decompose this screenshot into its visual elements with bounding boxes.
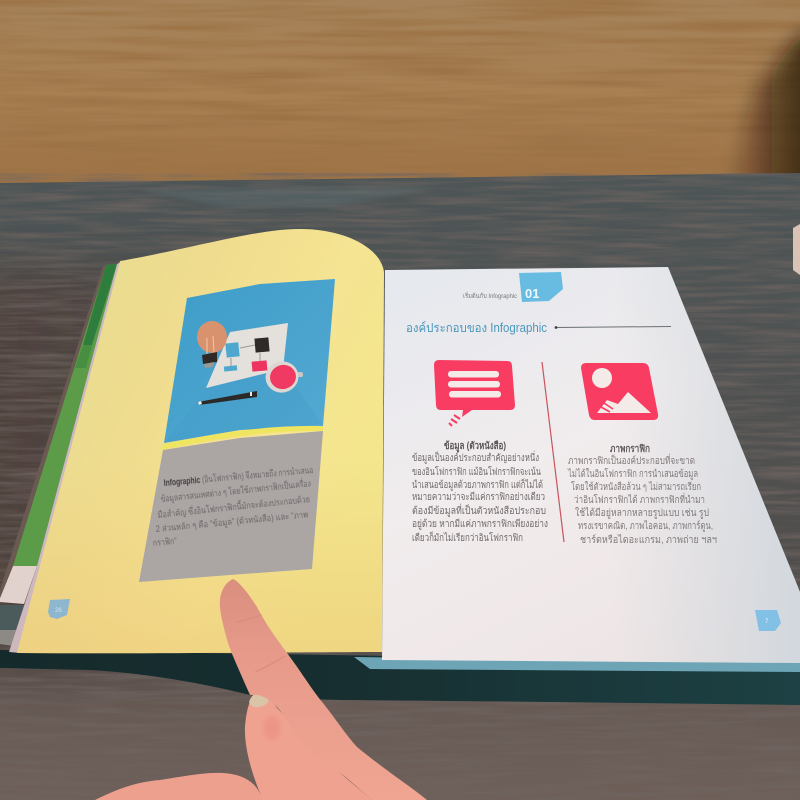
left yellow page: [17, 229, 384, 653]
paper with flow chart: [206, 323, 288, 388]
left page number tab: [48, 599, 70, 619]
blue illustration panel: [164, 279, 335, 443]
column: text data: เดียวก็มักไม่เรียกว่าอินโฟกราฟิก: [412, 530, 523, 544]
grey text box: ข้อมูลสารสนเทศต่าง ๆ โดยใช้ภาพกราฟิกเป็นเครื่อง: [160, 476, 311, 505]
yellow band under panel: [160, 426, 323, 450]
column: graphics: ภาพกราฟิก: [610, 443, 650, 455]
grey text box: กราฟิก”: [152, 536, 177, 548]
chapter tab 01: 01: [525, 286, 539, 301]
book shadow: [0, 650, 800, 705]
coffee mug: [262, 358, 303, 396]
right page number tab: [755, 610, 781, 631]
finger crease: [236, 615, 262, 622]
knuckle crease: [255, 656, 285, 672]
column divider: [542, 362, 564, 542]
column: text data: อยู่ด้วย หากมีแค่ภาพกราฟิกเพียงอย่าง: [412, 518, 548, 530]
light bulb: [197, 321, 227, 368]
page edge strip: [9, 262, 121, 653]
icon: picture: [581, 363, 658, 420]
left page number tab: 26: [55, 608, 62, 614]
right white page: [382, 267, 800, 663]
right page number tab: 7: [765, 619, 769, 625]
column: graphics: ชาร์ตหรือไดอะแกรม, ภาพถ่าย ฯลฯ: [580, 534, 717, 546]
back cover edge: [354, 657, 800, 672]
grey text box: Infographic (อินโฟกราฟิก) จึงหมายถึง การนำเสนอ: [163, 465, 314, 488]
column: graphics: ใช้ได้มีอยู่หลากหลายรูปแบบ เช่น รูป: [575, 507, 709, 519]
column: graphics: ภาพกราฟิกเป็นองค์ประกอบที่จะขาด: [568, 453, 695, 467]
thumb blush: [263, 716, 281, 740]
heading arrow: [555, 326, 671, 329]
column: text data: ข้อมูล (ตัวหนังสือ): [444, 440, 506, 453]
dark table surface: [0, 173, 800, 800]
column: graphics: ทรงเรขาคณิต, ภาพไอคอน, ภาพการ์ตูน,: [578, 520, 713, 532]
column: graphics: โดยใช้ตัวหนังสือล้วน ๆ ไม่สามารถเรียก: [571, 480, 701, 493]
pale box at right edge: [793, 224, 800, 275]
column: text data: หมายความว่าจะมีแค่กราฟิกอย่างเดียว: [412, 491, 545, 503]
hand pointing at page: [95, 579, 427, 800]
chapter label: เริ่มต้นกับ Infographic: [463, 291, 518, 300]
laptop edge below book: [0, 605, 24, 645]
column: text data: นำเสนอข้อมูลด้วยภาพกราฟิก แต่ก็ไม่ได้: [412, 477, 543, 491]
grey text box: มือสำคัญ ซึ่งอินโฟกราฟิกนี้มักจะต้องประกอบด้วย: [157, 492, 310, 520]
book: [0, 229, 800, 672]
column: text data: ต้องมีข้อมูลที่เป็นตัวหนังสือประกอบ: [412, 503, 546, 517]
wood wall background: [0, 0, 800, 200]
index finger: [220, 579, 427, 800]
grey text box: 2 ส่วนหลัก ๆ คือ “ข้อมูล” (ตัวหนังสือ) และ “ภาพ: [155, 509, 309, 535]
icon: text speech bubble: [434, 360, 515, 426]
column: text data: ของอินโฟกราฟิก แม้อินโฟกราฟิกจะเน้น: [412, 465, 541, 478]
column: graphics: ไม่ได้ในอินโฟกราฟิก การนำเสนอข้อมูล: [567, 467, 698, 480]
grey text box: [139, 431, 323, 582]
column: graphics: ว่าอินโฟกราฟิกได้ ภาพกราฟิกที่นำมา: [574, 492, 705, 506]
column: graphics: [567, 443, 717, 546]
white page stack: [0, 566, 37, 604]
column: text data: [412, 440, 548, 544]
pen: [198, 391, 257, 405]
lower finger: [95, 773, 264, 800]
chapter tab 01: [519, 272, 563, 302]
thumbnail: [249, 693, 269, 707]
green cover strip: [13, 264, 117, 566]
column: text data: ข้อมูลเป็นองค์ประกอบสำคัญอย่างหนึ่ง: [412, 450, 539, 464]
thumb: [245, 693, 372, 800]
section heading: องค์ประกอบของ Infographic: [406, 321, 547, 335]
stack outer edge: [0, 265, 106, 598]
